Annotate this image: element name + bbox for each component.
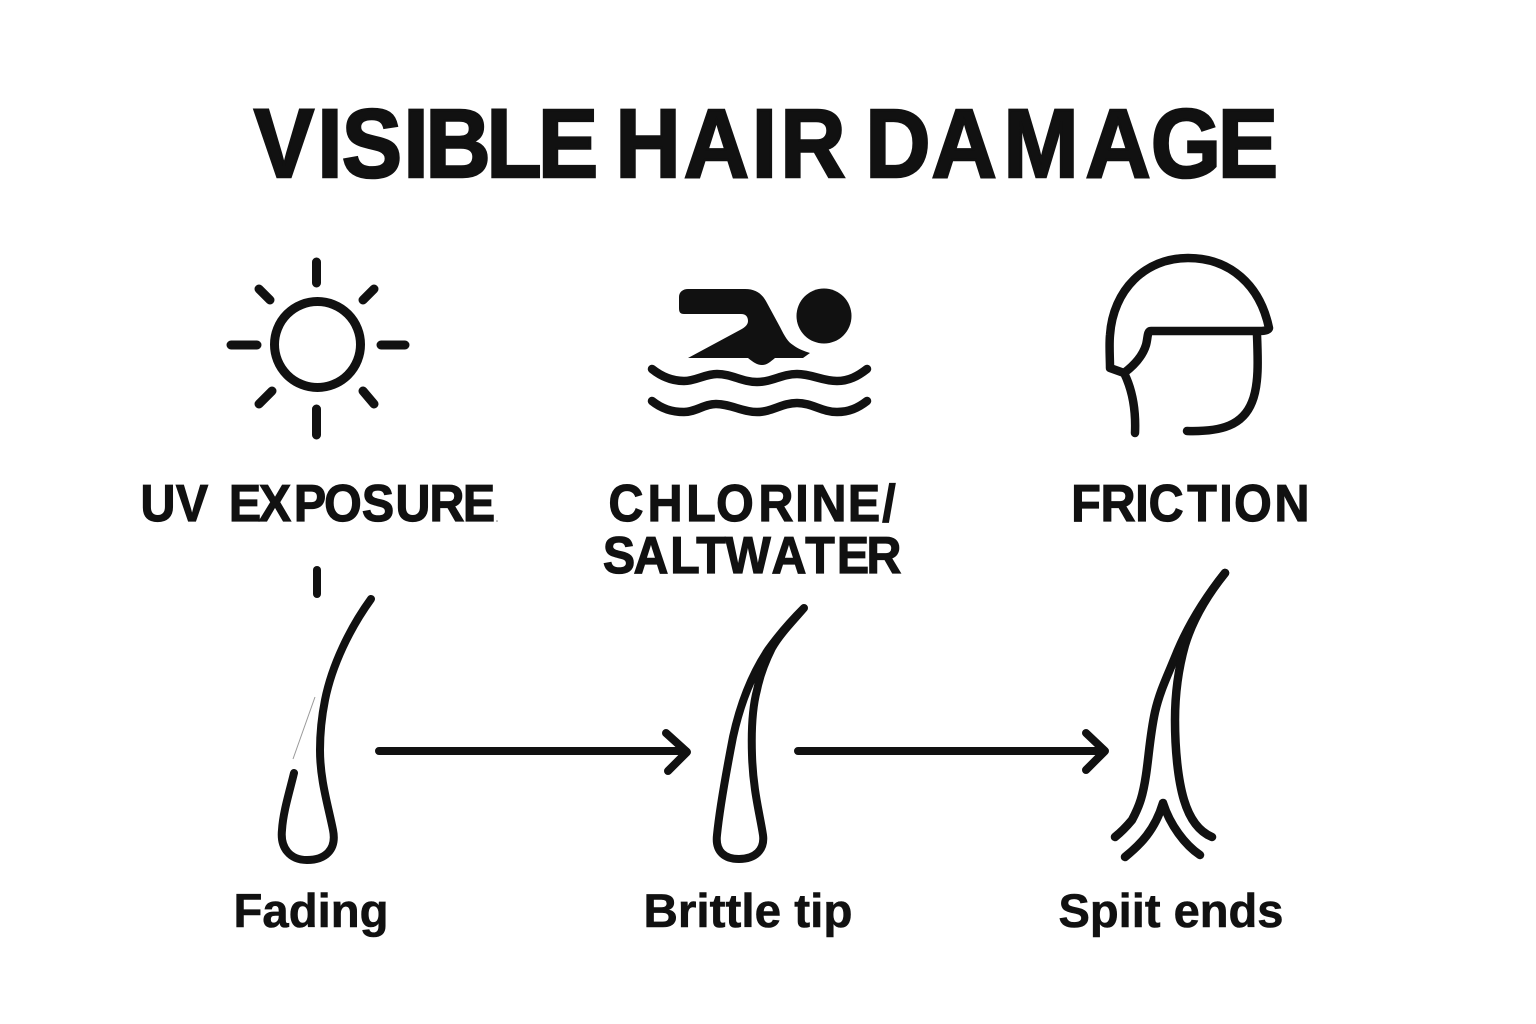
- label: fading: Fading: [234, 884, 388, 937]
- heading: chlorine/saltwater: CHLORINE/: [609, 474, 896, 532]
- icon: head: [1110, 258, 1269, 433]
- icon: hair split ends: [1115, 573, 1225, 857]
- stray dot: [496, 520, 498, 522]
- arrow 1: [379, 733, 687, 771]
- title: VISIBLE HAIR DAMAGE: [254, 89, 1278, 198]
- icon: hair brittle tip: [717, 608, 804, 859]
- arrow 2: [798, 733, 1105, 770]
- label: brittle tip: Brittle tip: [644, 884, 852, 937]
- label: split ends: Spiit ends: [1058, 884, 1284, 937]
- icon: sun: [231, 262, 405, 435]
- heading: chlorine/saltwater: [603, 474, 901, 584]
- connector tick: [313, 570, 321, 594]
- heading: chlorine/saltwater: SALTWATER: [603, 526, 901, 584]
- icon: swimmer: [652, 288, 867, 412]
- heading: friction: FRICTION: [1071, 474, 1309, 532]
- heading: UV exposure: UV EXPOSURE: [141, 474, 495, 532]
- icon: hair fading: [282, 599, 371, 860]
